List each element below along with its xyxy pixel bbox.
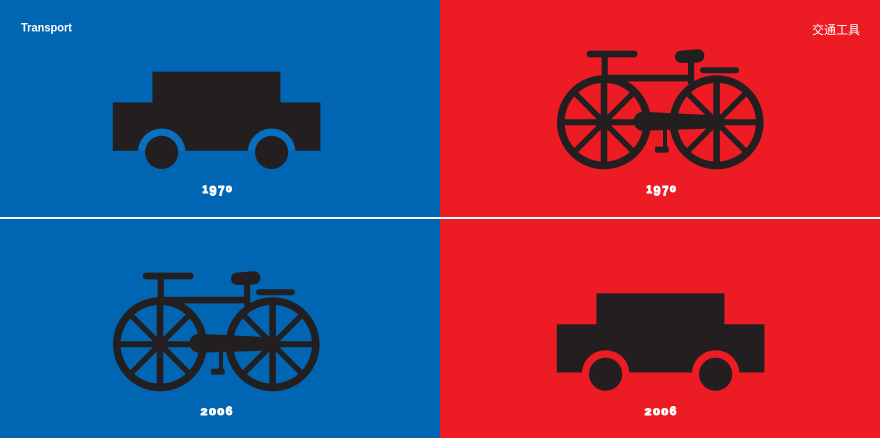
year label 2006 left bbox=[201, 404, 233, 418]
panel: Transport 1970, car on blue bbox=[0, 0, 440, 217]
icon: bicycle 2006 bbox=[117, 271, 316, 388]
heading: Transport: Transport bbox=[21, 22, 72, 34]
panel: Transport 2006, bicycle on blue bbox=[0, 219, 440, 438]
year label 1970 right bbox=[646, 182, 676, 198]
panel: Transport 1970, bicycle on red bbox=[440, 0, 880, 217]
wheel arches bbox=[141, 132, 292, 151]
icon: bicycle 1970 bbox=[561, 49, 760, 166]
heading: 交通工具: 交通工具 bbox=[812, 22, 860, 37]
panel: Transport 2006, car on red bbox=[440, 219, 880, 438]
icon: car 1970 bbox=[113, 72, 320, 169]
year label 2006 right bbox=[645, 404, 677, 418]
icon: car 2006 bbox=[557, 293, 764, 391]
year label 1970 left bbox=[202, 182, 232, 198]
